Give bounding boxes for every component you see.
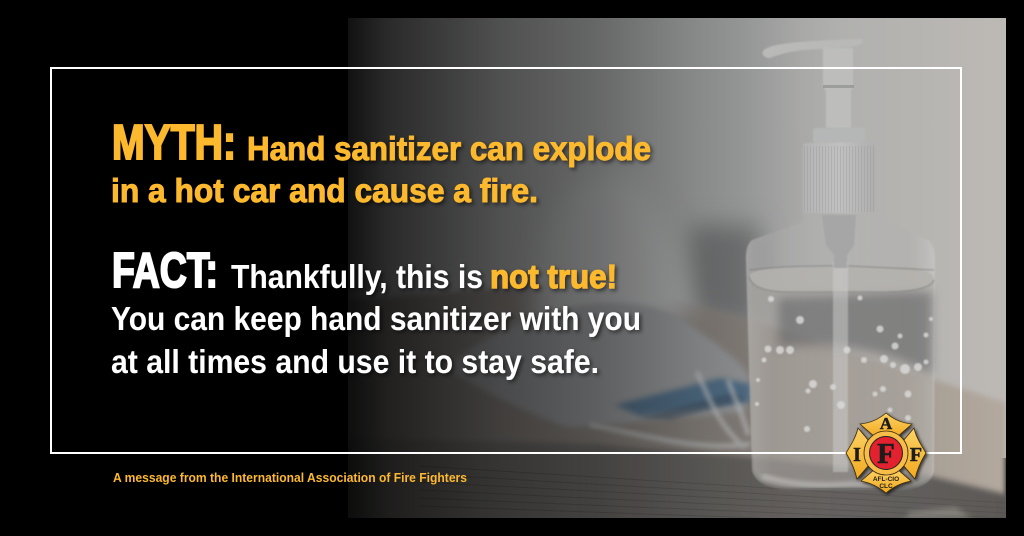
bubbles — [755, 296, 933, 432]
ribbed screw cap — [803, 142, 875, 213]
background photo: bottle and face mask on a table — [340, 18, 1024, 536]
pump stem ring — [823, 85, 854, 88]
liquid — [749, 268, 934, 487]
logo letters — [853, 414, 922, 490]
fact label: FACT: — [112, 244, 218, 298]
logo right arm — [903, 428, 926, 479]
highlight on table corner — [905, 507, 972, 518]
mask ear loops — [590, 372, 750, 448]
wall — [348, 18, 1006, 458]
myth label: MYTH: — [112, 116, 236, 170]
logo letters: F — [877, 438, 895, 470]
IAFF logo — [846, 413, 926, 493]
fact text block — [111, 244, 641, 380]
cap ribs — [804, 146, 874, 212]
white frame — [51, 68, 961, 453]
mask body — [445, 303, 750, 428]
bottle glass body — [746, 213, 935, 490]
logo left arm — [846, 428, 869, 479]
shadow on wall beside bottle — [690, 225, 760, 330]
bottle base highlight — [762, 476, 880, 485]
mask blue edge — [615, 378, 750, 416]
folded mask back — [527, 195, 700, 322]
wood grain — [471, 469, 976, 518]
pump collar — [813, 128, 865, 143]
pump nozzle — [762, 39, 863, 58]
bottle — [746, 39, 935, 490]
liquid surface — [749, 267, 934, 292]
footer message: A message from the International Association of Fire Fighters — [113, 470, 467, 485]
logo letters: CLC — [879, 483, 893, 490]
dark band seen through liquid — [778, 292, 932, 375]
mask dark fold — [640, 392, 745, 420]
dark fade overlay over photo — [348, 18, 1006, 518]
logo letters: I — [853, 444, 861, 466]
myth line 1: Hand sanitizer can explode — [247, 130, 651, 167]
pump stem — [823, 48, 853, 128]
logo ring — [864, 431, 908, 475]
dip tube — [833, 262, 848, 472]
fact line 2: You can keep hand sanitizer with you — [111, 300, 641, 337]
fact line 1: Thankfully, this is — [231, 258, 483, 295]
logo letters: F — [910, 444, 922, 466]
pump neck inside bottle — [822, 215, 856, 268]
logo red center — [870, 436, 902, 470]
logo bottom arm — [861, 469, 911, 493]
logo top arm — [860, 413, 912, 437]
fact line 3: at all times and use it to stay safe. — [111, 343, 599, 380]
table top — [372, 287, 1006, 498]
dark table foreground — [470, 444, 1006, 518]
logo letters: AFL-CIO — [873, 476, 899, 483]
liquid surface edge — [749, 266, 934, 292]
myth text block — [111, 116, 651, 209]
myth line 2: in a hot car and cause a fire. — [111, 172, 538, 209]
logo letters: A — [880, 414, 893, 433]
not true emphasis: not true! — [490, 258, 617, 295]
